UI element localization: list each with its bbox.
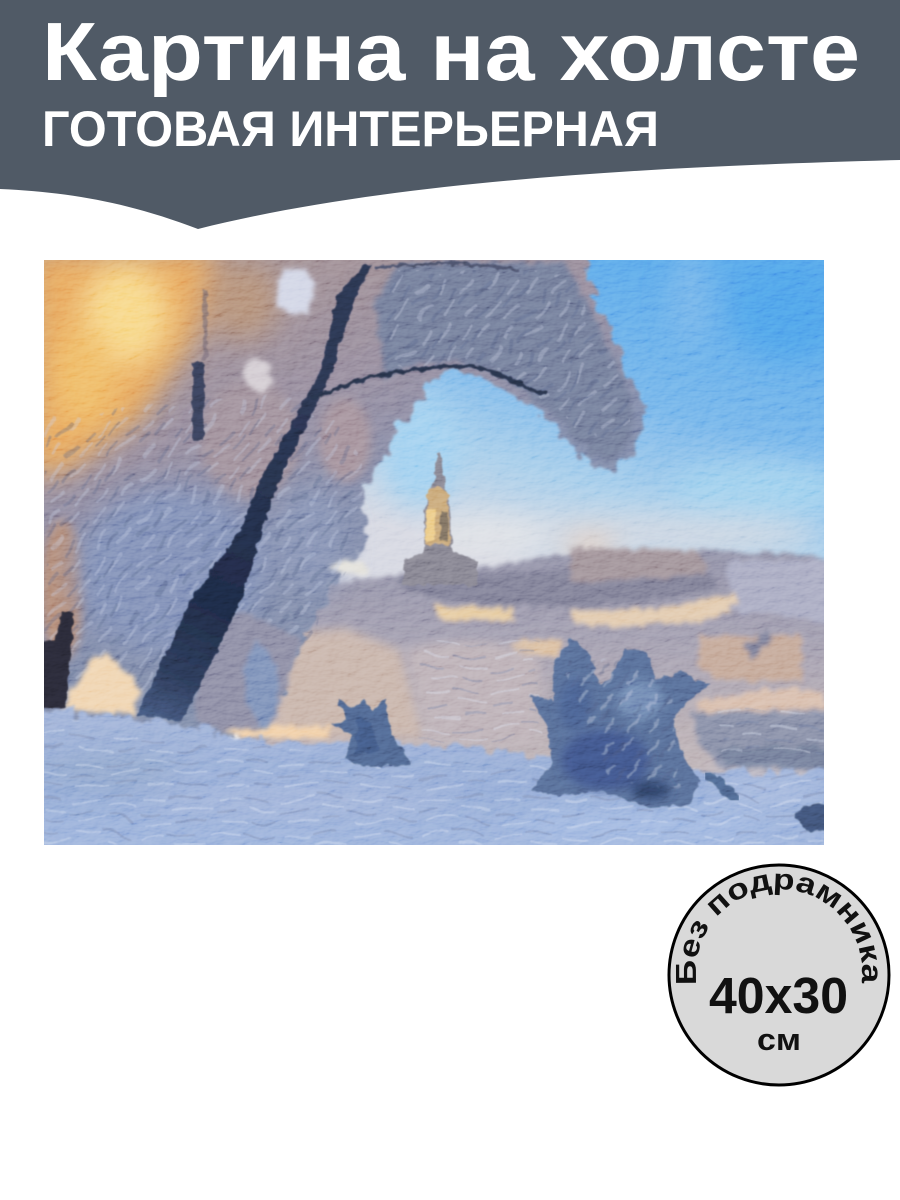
curved caption (696, 889, 862, 985)
snow and hill brush strokes (44, 640, 824, 845)
lit band one (434, 606, 518, 620)
bush side twig (708, 775, 736, 798)
banner shape (0, 0, 900, 229)
dark town band (396, 568, 718, 609)
lower canopy blue (75, 485, 344, 655)
sky (338, 260, 824, 584)
far town buildings (570, 548, 708, 582)
lit band three (510, 638, 560, 658)
small bush (330, 698, 412, 767)
size badge: Без подрамника (676, 874, 878, 984)
young tree canopy (195, 613, 300, 750)
bush shading (559, 679, 670, 800)
header banner (0, 0, 900, 229)
snow foreground (44, 704, 824, 845)
mid canopy warm patches (40, 380, 371, 660)
dark lower band (718, 742, 824, 772)
bush body (530, 637, 711, 808)
sky gaps in foliage (244, 268, 370, 575)
arching branch (312, 366, 545, 398)
size value: 40x30 (709, 967, 848, 1024)
badge circle (669, 865, 889, 1085)
peach building (698, 636, 802, 682)
upper branch (375, 264, 520, 270)
lit beige band (694, 688, 825, 712)
size badge (668, 864, 890, 1086)
unit: см (757, 1022, 801, 1057)
painting: winter landscape (44, 260, 824, 845)
left post (44, 610, 75, 710)
beige wall (270, 628, 425, 738)
tree trunk and branches (136, 264, 545, 722)
lit band two (570, 592, 738, 626)
title: Картина на холсте (42, 5, 860, 98)
golden foliage (30, 250, 280, 480)
foliage brush dabs (44, 270, 630, 700)
rear trunk dark (192, 362, 204, 440)
sky light strokes (380, 250, 850, 558)
mauve building shade (745, 630, 774, 660)
bell tower (402, 452, 478, 585)
subtitle: ГОТОВАЯ ИНТЕРЬЕРНАЯ (42, 101, 659, 157)
gray blue band (690, 712, 850, 770)
bush dabs (560, 660, 680, 790)
main trunk (136, 264, 372, 722)
mid gray slope (406, 639, 541, 716)
warm glow behind trunk (64, 652, 330, 738)
right pale haze (724, 557, 824, 624)
corner bush (794, 804, 830, 832)
distant hill and town (264, 544, 824, 778)
canvas impasto relief (44, 260, 824, 845)
rear trunk upper (202, 290, 208, 360)
snow light patches (74, 763, 819, 830)
right canopy shading (375, 262, 634, 460)
large bush (530, 637, 711, 808)
main tree canopy (20, 240, 644, 738)
